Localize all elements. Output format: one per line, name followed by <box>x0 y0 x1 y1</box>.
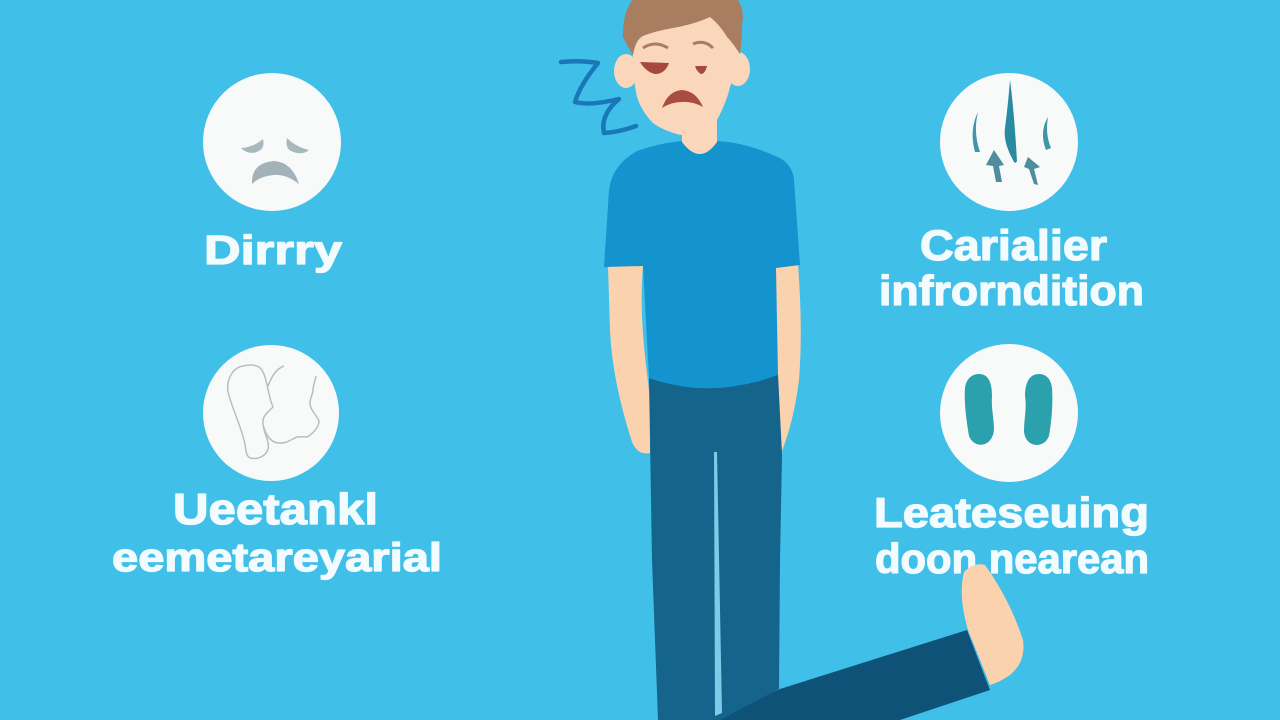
ears <box>614 52 750 88</box>
label: Leateseuing doon nearean: Leateseuing <box>874 489 1149 536</box>
illustration: tired man standing with raised leg <box>561 0 1023 720</box>
icon: dizzy squiggle <box>561 61 636 133</box>
panel: leg symptom <box>874 344 1149 582</box>
panel: dizzy symptom <box>203 73 342 273</box>
face <box>633 10 740 135</box>
label: Ueetankl eemetareyarial: eemetareyarial <box>112 536 442 580</box>
label: Carialier infrorndition: infrorndition <box>879 267 1144 314</box>
panel: cartilage symptom <box>879 73 1144 314</box>
icon: foot outlines <box>203 345 339 481</box>
label: Ueetankl eemetareyarial: Ueetankl <box>173 485 378 534</box>
panel: foot symptom <box>112 345 442 580</box>
hair <box>622 0 743 55</box>
label: Leateseuing doon nearean <box>874 489 1149 582</box>
icon: two footprints <box>940 344 1078 482</box>
label: Ueetankl eemetareyarial <box>112 485 442 580</box>
arms <box>608 264 801 454</box>
eyes and brows <box>640 42 713 74</box>
shirt <box>604 141 800 388</box>
icon: hair strands and arrows <box>940 73 1078 211</box>
mouth <box>662 90 703 108</box>
label: Leateseuing doon nearean: doon nearean <box>875 535 1149 582</box>
raised leg foot <box>962 564 1023 685</box>
label: Carialier infrorndition: Carialier <box>920 222 1107 270</box>
label: Carialier infrorndition <box>879 222 1144 314</box>
label: Dirrry: Dirrry <box>204 227 342 273</box>
raised leg <box>708 630 990 720</box>
standing legs <box>649 374 782 720</box>
icon: sad face <box>203 73 341 211</box>
neck <box>682 118 717 154</box>
